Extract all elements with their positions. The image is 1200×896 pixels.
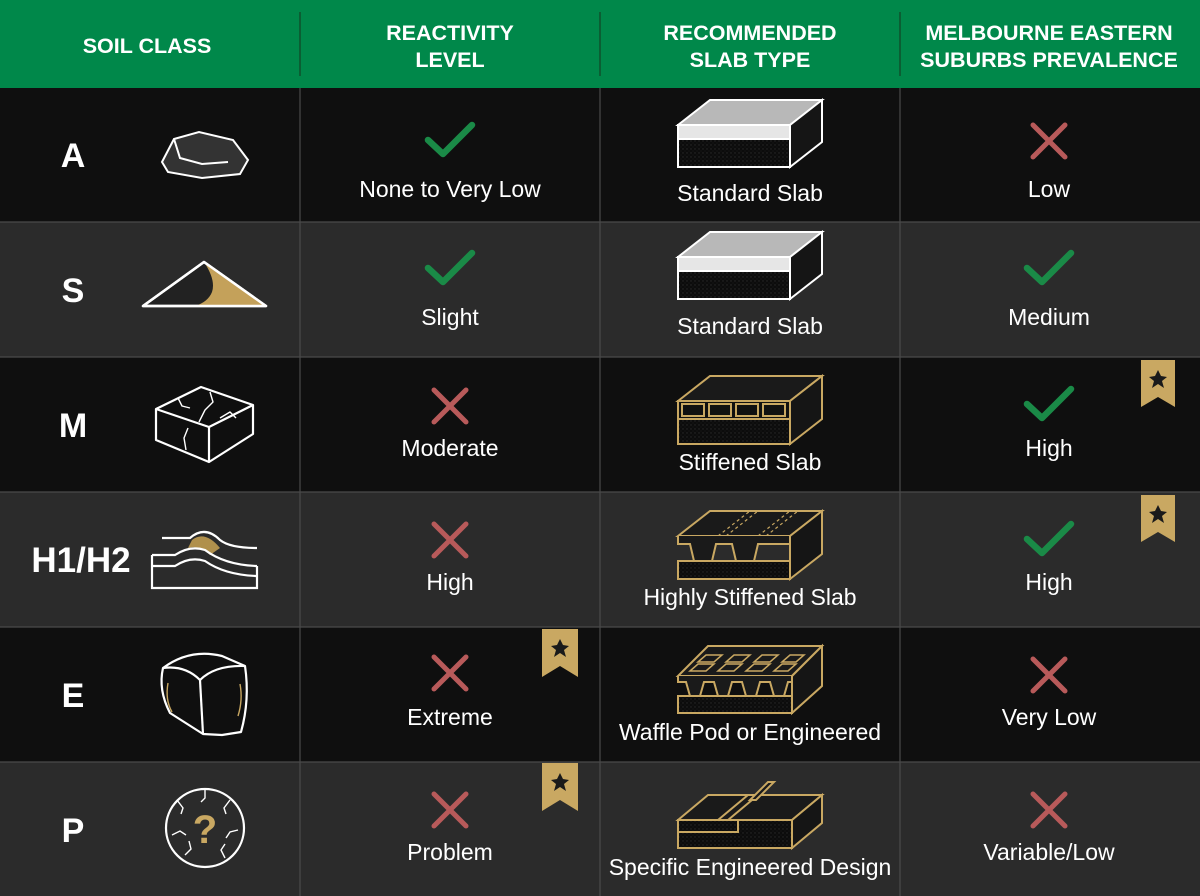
header bar: SOIL CLASS	[83, 34, 211, 58]
ribbon badge	[1141, 495, 1175, 542]
reactivity: check	[428, 125, 472, 154]
reactivity: cross	[434, 390, 466, 422]
row H1/H2: High	[426, 569, 474, 595]
reactivity: cross	[434, 524, 466, 556]
header bar: MELBOURNE EASTERN	[925, 21, 1173, 45]
header bar: SUBURBS PREVALENCE	[920, 48, 1178, 72]
row P: Specific Engineered Design	[609, 854, 891, 880]
prevalence: check	[1027, 253, 1071, 282]
icon: cracked circle with question mark: ?	[193, 808, 217, 852]
reactivity: check	[428, 253, 472, 282]
slab icon: engineered design	[678, 782, 822, 848]
soil class label M: M	[59, 407, 87, 445]
backgrounds	[0, 88, 1200, 222]
prevalence: check	[1027, 389, 1071, 418]
slab icon: standard	[678, 100, 822, 167]
row E: Waffle Pod or Engineered	[619, 719, 881, 745]
icon: heaving ground	[152, 532, 257, 588]
prevalence: cross	[1033, 659, 1065, 691]
row H1/H2	[31, 495, 1175, 610]
row A: None to Very Low	[359, 176, 541, 202]
icon: sand dune	[143, 262, 266, 306]
icon: cracked circle with question mark	[166, 789, 244, 867]
row E: Extreme	[407, 704, 493, 730]
reactivity: cross	[434, 794, 466, 826]
soil class label E: E	[62, 677, 84, 715]
header bar: SLAB TYPE	[690, 48, 810, 72]
row P: Problem	[407, 839, 493, 865]
row M: High	[1025, 435, 1073, 461]
row H1/H2: High	[1025, 569, 1073, 595]
row A	[61, 100, 1070, 206]
prevalence: cross	[1033, 794, 1065, 826]
slab icon: stiffened	[678, 376, 822, 444]
row E	[62, 629, 1097, 745]
row S	[62, 232, 1090, 339]
slab icon: waffle pod	[678, 646, 822, 713]
row S: Standard Slab	[677, 313, 823, 339]
row S: Medium	[1008, 304, 1090, 330]
row A: Standard Slab	[677, 180, 823, 206]
row P	[62, 763, 1115, 880]
slab icon: standard	[678, 232, 822, 299]
row M: Stiffened Slab	[679, 449, 821, 475]
ribbon badge	[1141, 360, 1175, 407]
header bar: REACTIVITY	[386, 21, 514, 45]
header bar: LEVEL	[415, 48, 485, 72]
soil class label S: S	[62, 272, 84, 310]
ribbon badge	[542, 763, 578, 811]
row A: Low	[1028, 176, 1070, 202]
prevalence: cross	[1033, 125, 1065, 157]
icon: cracked clay block	[156, 387, 253, 462]
row S: Slight	[421, 304, 479, 330]
prevalence: check	[1027, 524, 1071, 553]
icon: swelling block	[162, 654, 247, 735]
slab icon: highly stiffened	[678, 511, 822, 579]
row H1/H2: Highly Stiffened Slab	[643, 584, 857, 610]
row E: Very Low	[1002, 704, 1097, 730]
icon: rock	[162, 132, 248, 178]
row P: Variable/Low	[983, 839, 1115, 865]
ribbon badge	[542, 629, 578, 677]
header bar: RECOMMENDED	[663, 21, 837, 45]
soil class label P: P	[62, 812, 84, 850]
row M: Moderate	[401, 435, 499, 461]
soil class label A: A	[61, 137, 85, 175]
reactivity: cross	[434, 657, 466, 689]
soil class label H1/H2: H1/H2	[31, 541, 131, 580]
row M	[59, 360, 1175, 475]
header bar	[0, 0, 1200, 88]
